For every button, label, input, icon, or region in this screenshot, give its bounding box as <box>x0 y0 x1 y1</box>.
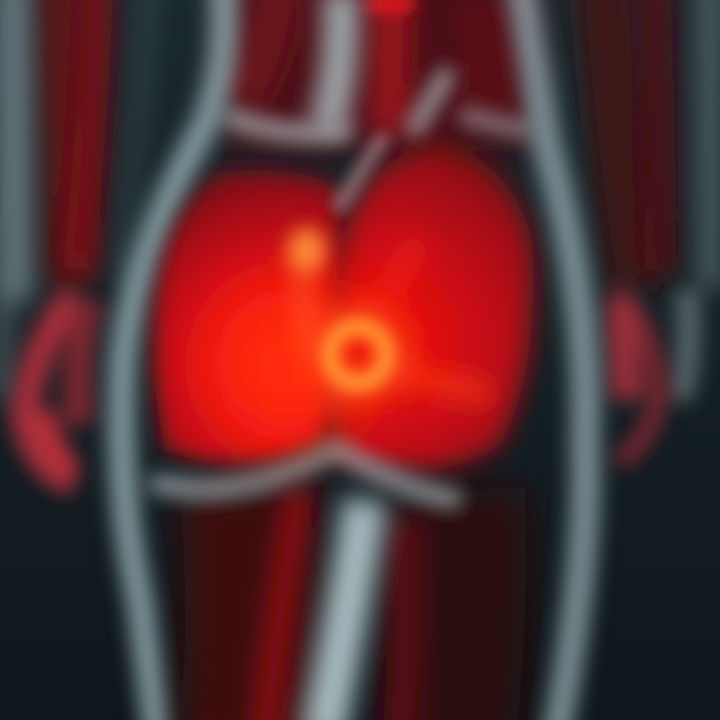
body outline left <box>121 0 224 720</box>
inner thigh band <box>322 500 365 720</box>
body outline right <box>520 0 586 720</box>
left hand <box>24 295 90 482</box>
left arm <box>1 0 148 400</box>
right hand <box>615 290 660 462</box>
pain rays <box>300 240 490 395</box>
right lobe <box>327 142 533 470</box>
small glow spot <box>289 228 325 272</box>
left lobe <box>154 170 340 463</box>
target ring on pain point <box>308 305 408 405</box>
central cleft highlight <box>338 135 385 210</box>
legs <box>245 490 461 720</box>
upper torso <box>225 0 535 150</box>
right arm <box>605 0 710 400</box>
pain glow <box>215 290 355 440</box>
red gluteal lobes <box>154 142 533 470</box>
gluteal fold <box>150 448 460 500</box>
